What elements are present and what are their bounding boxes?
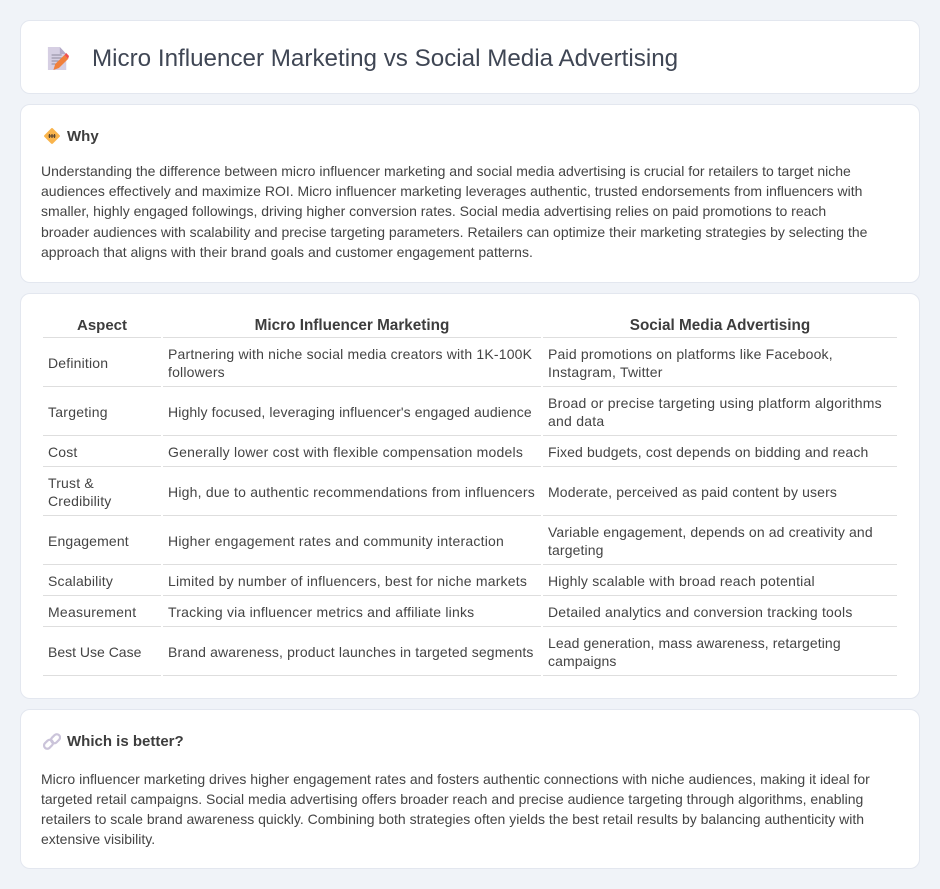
best use case: social media: Lead generation, mass awareness, retargeting [548, 635, 841, 651]
row: trust and credibility: Credibility [48, 493, 111, 509]
text block: why paragraph: smaller, highly engaged followings, driving higher conversion rates. Social media advertising relies on paid promotions to reach [41, 203, 826, 219]
measurement: micro influencer: Tracking via influencer metrics and affiliate links [168, 604, 474, 620]
heading: which is better: Which is better? [67, 733, 184, 750]
title: Micro Influencer Marketing vs Social Media Advertising [92, 45, 678, 72]
measurement: social media: Detailed analytics and conversion tracking tools [548, 604, 853, 620]
scalability: social media: Highly scalable with broad reach potential [548, 573, 815, 589]
text block: why paragraph: approach that aligns with their brand goals and customer engagement patterns. [41, 244, 533, 260]
row: scalability: Scalability [48, 573, 113, 589]
engagement: social media: Variable engagement, depends on ad creativity and [548, 524, 873, 540]
panel: title card [20, 20, 920, 94]
text block: which is better paragraph: extensive visibility. [41, 831, 155, 847]
best use case: social media [548, 635, 841, 669]
icon: chain link [43, 733, 61, 750]
text block: which is better paragraph: targeted retail campaigns. Social media advertising offers broader reach and precise audience targeting through algorithms, enabling [41, 791, 863, 807]
row: engagement: Engagement [48, 533, 129, 549]
text block: which is better paragraph [41, 771, 870, 847]
row: cost: Cost [48, 444, 78, 460]
definition: social media: Paid promotions on platforms like Facebook, [548, 346, 833, 362]
definition: social media: Instagram, Twitter [548, 364, 663, 380]
table header: social media advertising: Social Media Advertising [630, 317, 810, 334]
table header: micro influencer marketing: Micro Influencer Marketing [255, 317, 449, 334]
text block: why paragraph: broader audiences with scalability and precise targeting parameters. Retailers can optimize their marketing strategies by selecting the [41, 224, 867, 240]
panel: which is better card [20, 709, 920, 869]
trust: micro influencer: High, due to authentic recommendations from influencers [168, 484, 535, 500]
targeting: micro influencer: Highly focused, leveraging influencer's engaged audience [168, 404, 532, 420]
text block: why paragraph: Understanding the difference between micro influencer marketing and social media advertising is crucial for retailers to target niche [41, 163, 851, 179]
best use case: social media: campaigns [548, 653, 617, 669]
icon: warning diamond [44, 128, 60, 144]
panel: comparison table card [20, 293, 920, 699]
best use case: micro influencer: Brand awareness, product launches in targeted segments [168, 644, 534, 660]
targeting: social media [548, 395, 882, 429]
table header: aspect: Aspect [77, 317, 127, 334]
icon: document with pencil [48, 47, 69, 70]
heading: why: Why [67, 128, 99, 145]
text block: which is better paragraph: retailers to scale brand awareness quickly. Combining both strategies often yields the best retail results by balancing authenticity with [41, 811, 864, 827]
row: trust and credibility [48, 475, 112, 509]
definition: social media [548, 346, 833, 380]
text block: which is better paragraph: Micro influencer marketing drives higher engagement rates and fosters authentic connections with niche audiences, making it ideal for [41, 771, 870, 787]
scalability: micro influencer: Limited by number of influencers, best for niche markets [168, 573, 527, 589]
definition: micro influencer: Partnering with niche social media creators with 1K-100K [168, 346, 532, 362]
engagement: micro influencer: Higher engagement rates and community interaction [168, 533, 504, 549]
row: targeting: Targeting [48, 404, 108, 420]
cost: social media: Fixed budgets, cost depends on bidding and reach [548, 444, 868, 460]
definition: micro influencer: followers [168, 364, 225, 380]
trust: social media: Moderate, perceived as paid content by users [548, 484, 837, 500]
cost: micro influencer: Generally lower cost with flexible compensation models [168, 444, 523, 460]
engagement: social media [548, 524, 873, 558]
text block: why paragraph [41, 163, 867, 260]
targeting: social media: and data [548, 413, 604, 429]
targeting: social media: Broad or precise targeting using platform algorithms [548, 395, 882, 411]
panel: why card [20, 104, 920, 283]
row: measurement: Measurement [48, 604, 136, 620]
row: best use case: Best Use Case [48, 644, 141, 660]
text block: why paragraph: audiences effectively and maximize ROI. Micro influencer marketing leverages authentic, trusted endorsements from influencers with [41, 183, 862, 199]
definition: micro influencer [168, 346, 532, 380]
engagement: social media: targeting [548, 542, 604, 558]
row: trust and credibility: Trust & [48, 475, 94, 491]
row: definition: Definition [48, 355, 108, 371]
